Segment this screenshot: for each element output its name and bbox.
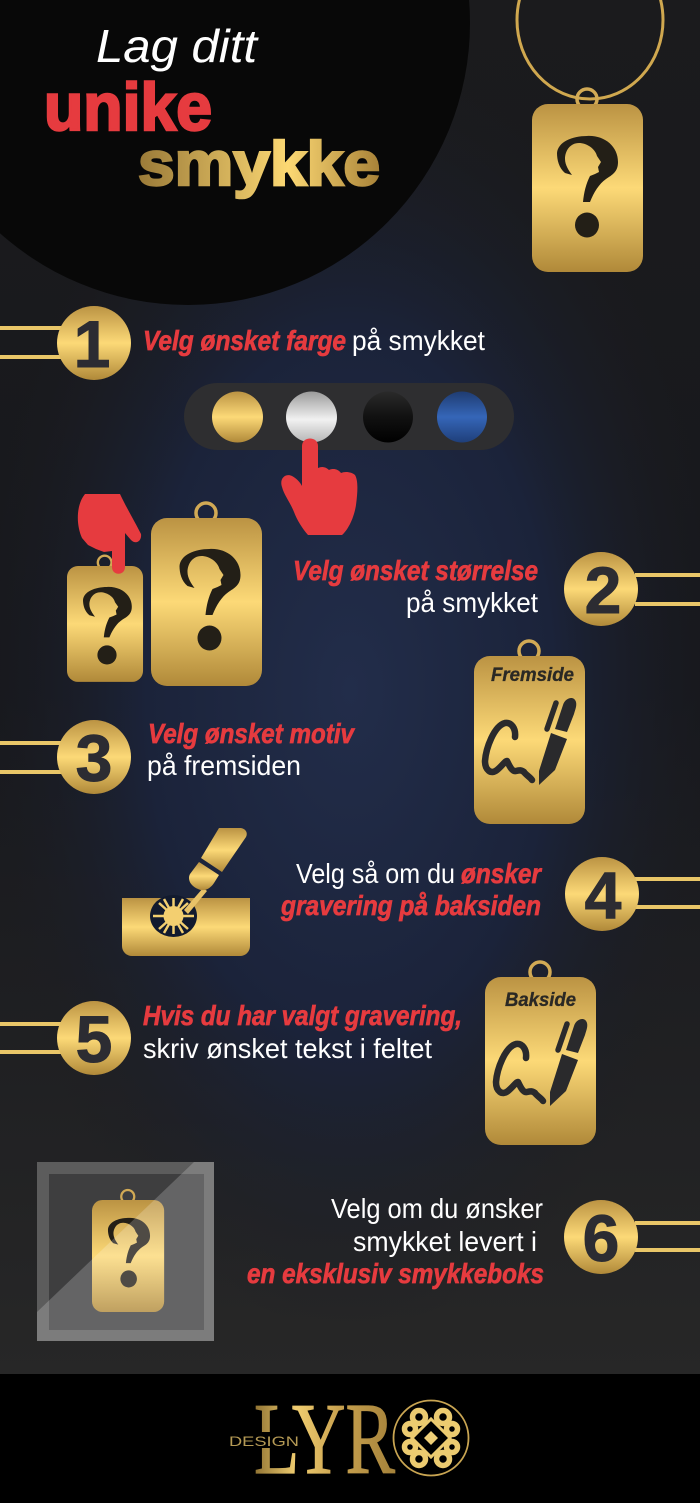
step 4 text: Velg så om du — [296, 858, 455, 889]
step 5 text: Hvis du har valgt gravering, — [143, 1000, 462, 1031]
step 2 text: på smykket — [406, 587, 538, 618]
front pendant with signature: Fremside — [491, 665, 574, 686]
jewellery box with pendant — [37, 1162, 214, 1341]
title: smykke — [138, 130, 380, 199]
step 1 badge — [0, 306, 131, 381]
step 1 text: Velg ønsket farge — [143, 325, 346, 356]
step 1 badge: 1 — [74, 307, 110, 381]
title: unike — [44, 70, 212, 145]
step 4 text: ønsker — [461, 858, 543, 889]
step 5 text: skriv ønsket tekst i feltet — [143, 1033, 432, 1064]
step 1 text — [143, 325, 485, 356]
step 6 text: Velg om du ønsker — [331, 1193, 543, 1224]
colour selector — [184, 383, 514, 450]
step 3 text — [147, 718, 355, 781]
step 4 badge — [565, 857, 700, 932]
step 3 text: Velg ønsket motiv — [148, 718, 355, 749]
step 2 badge: 2 — [585, 553, 621, 627]
logo: LYR — [254, 1383, 395, 1496]
step 6 text: en eksklusiv smykkeboks — [247, 1258, 544, 1289]
step 2 text: Velg ønsket størrelse — [293, 555, 538, 586]
step 6 badge: 6 — [583, 1201, 619, 1275]
footer band — [0, 1374, 700, 1503]
front pendant with signature — [474, 641, 585, 824]
step 5 badge — [0, 1001, 131, 1076]
step 2 badge — [564, 552, 700, 627]
step 3 badge — [0, 720, 131, 795]
step 5 text — [143, 1000, 462, 1064]
title — [44, 20, 380, 199]
step 4 badge: 4 — [585, 858, 622, 932]
step 6 text: smykket levert i — [353, 1226, 537, 1257]
back pendant with signature: Bakside — [505, 990, 576, 1011]
step 4 text: gravering på baksiden — [280, 890, 541, 921]
step 4 text — [280, 858, 543, 921]
black title circle — [0, 0, 470, 305]
small and large pendants — [67, 503, 262, 686]
necklace with question-mark pendant — [517, 0, 663, 272]
title: Lag ditt — [96, 20, 259, 72]
step 3 text: på fremsiden — [147, 750, 301, 781]
icon: pointing hand down — [78, 494, 141, 574]
step 3 badge: 3 — [76, 721, 112, 795]
icon: pointing hand up — [281, 438, 357, 535]
step 1 text: på smykket — [352, 325, 485, 356]
step 6 text — [247, 1193, 544, 1289]
back pendant with signature — [485, 962, 596, 1145]
step 2 text — [293, 555, 538, 618]
step 6 badge — [564, 1200, 700, 1275]
icon: laser engraving — [122, 828, 250, 956]
step 5 badge: 5 — [76, 1002, 112, 1076]
logo: DESIGN — [229, 1433, 299, 1449]
